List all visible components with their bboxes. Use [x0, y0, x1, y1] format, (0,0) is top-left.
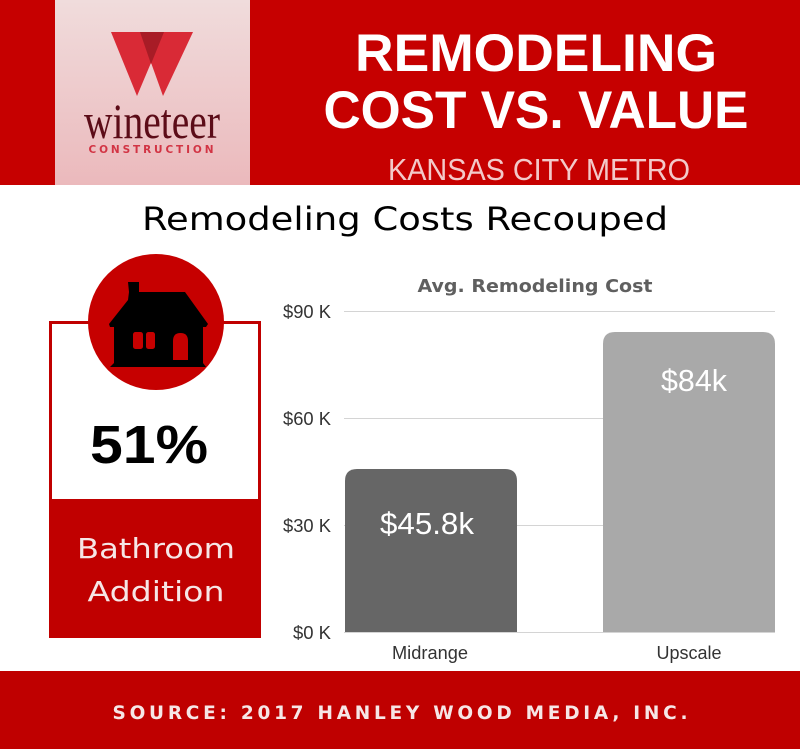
bar: midrange: $45.8k: [380, 506, 475, 541]
x axis labels: [392, 643, 722, 663]
logo mark: [111, 32, 193, 96]
label: Addition: [88, 575, 224, 608]
y axis labels: $30 K: [283, 516, 331, 536]
logo subtitle: CONSTRUCTION: [88, 144, 214, 156]
x axis labels: Upscale: [656, 643, 722, 663]
subtitle: KANSAS CITY METRO: [388, 152, 690, 187]
bar: upscale: $84k: [661, 363, 727, 398]
label: [77, 532, 235, 608]
icon: red circle with house: [88, 254, 224, 390]
footer band: [0, 671, 800, 749]
logo panel: [55, 0, 250, 185]
title line 1: REMODELING: [355, 24, 717, 83]
header band: [0, 0, 800, 187]
x axis labels: Midrange: [392, 643, 468, 663]
bar chart: [283, 276, 775, 663]
chart title: Avg. Remodeling Cost: [418, 276, 653, 297]
bar: upscale: [603, 332, 775, 632]
bar: midrange: [345, 469, 517, 632]
y axis labels: $0 K: [293, 623, 331, 643]
y axis labels: $90 K: [283, 302, 331, 322]
source text: SOURCE: 2017 HANLEY WOOD MEDIA, INC.: [112, 703, 688, 724]
panel: bathroom addition: [49, 254, 261, 638]
logo wordmark: wineteer: [84, 93, 220, 149]
y axis labels: $60 K: [283, 409, 331, 429]
label: Bathroom: [77, 532, 235, 565]
title line 2: COST VS. VALUE: [324, 81, 748, 140]
section heading: Remodeling Costs Recouped: [142, 200, 668, 238]
y axis labels: [283, 302, 331, 643]
percentage: 51%: [90, 415, 208, 475]
